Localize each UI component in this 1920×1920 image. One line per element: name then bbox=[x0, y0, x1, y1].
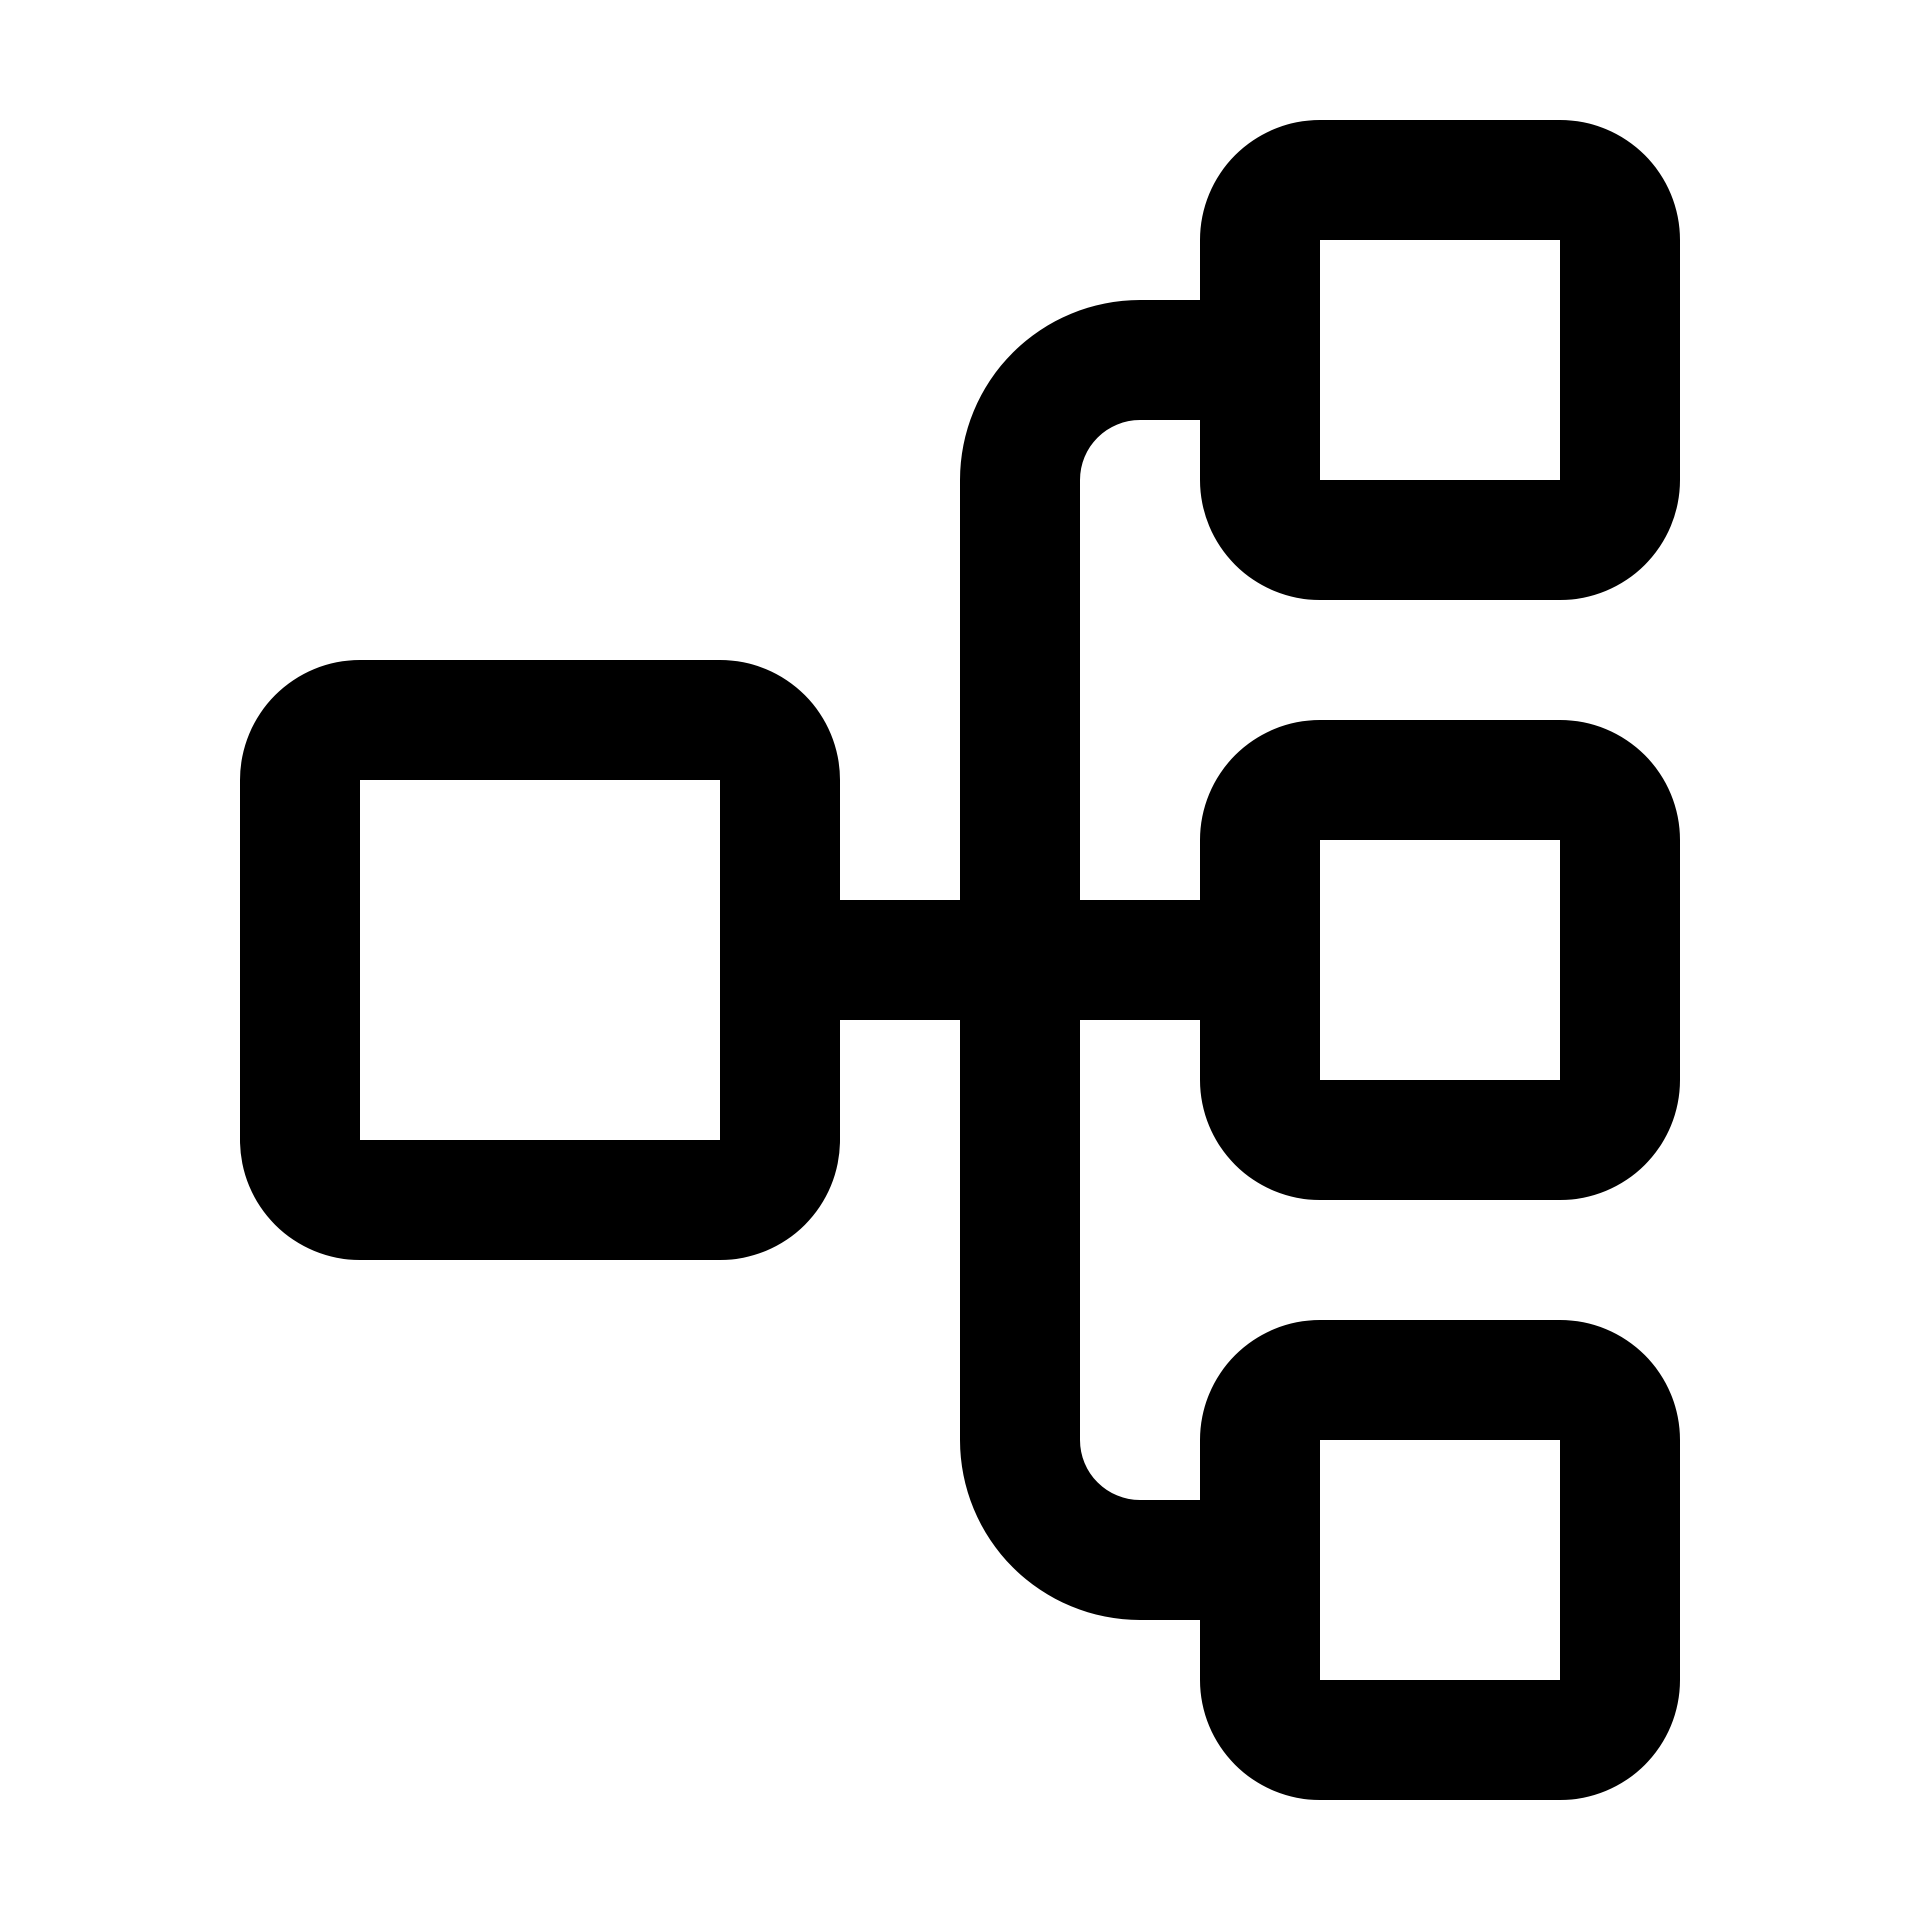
root box bbox=[240, 660, 840, 1260]
middle child box bbox=[1200, 720, 1680, 1200]
connector lines bbox=[800, 300, 1280, 1620]
top child box bbox=[1200, 120, 1680, 600]
bottom child box bbox=[1200, 1320, 1680, 1800]
